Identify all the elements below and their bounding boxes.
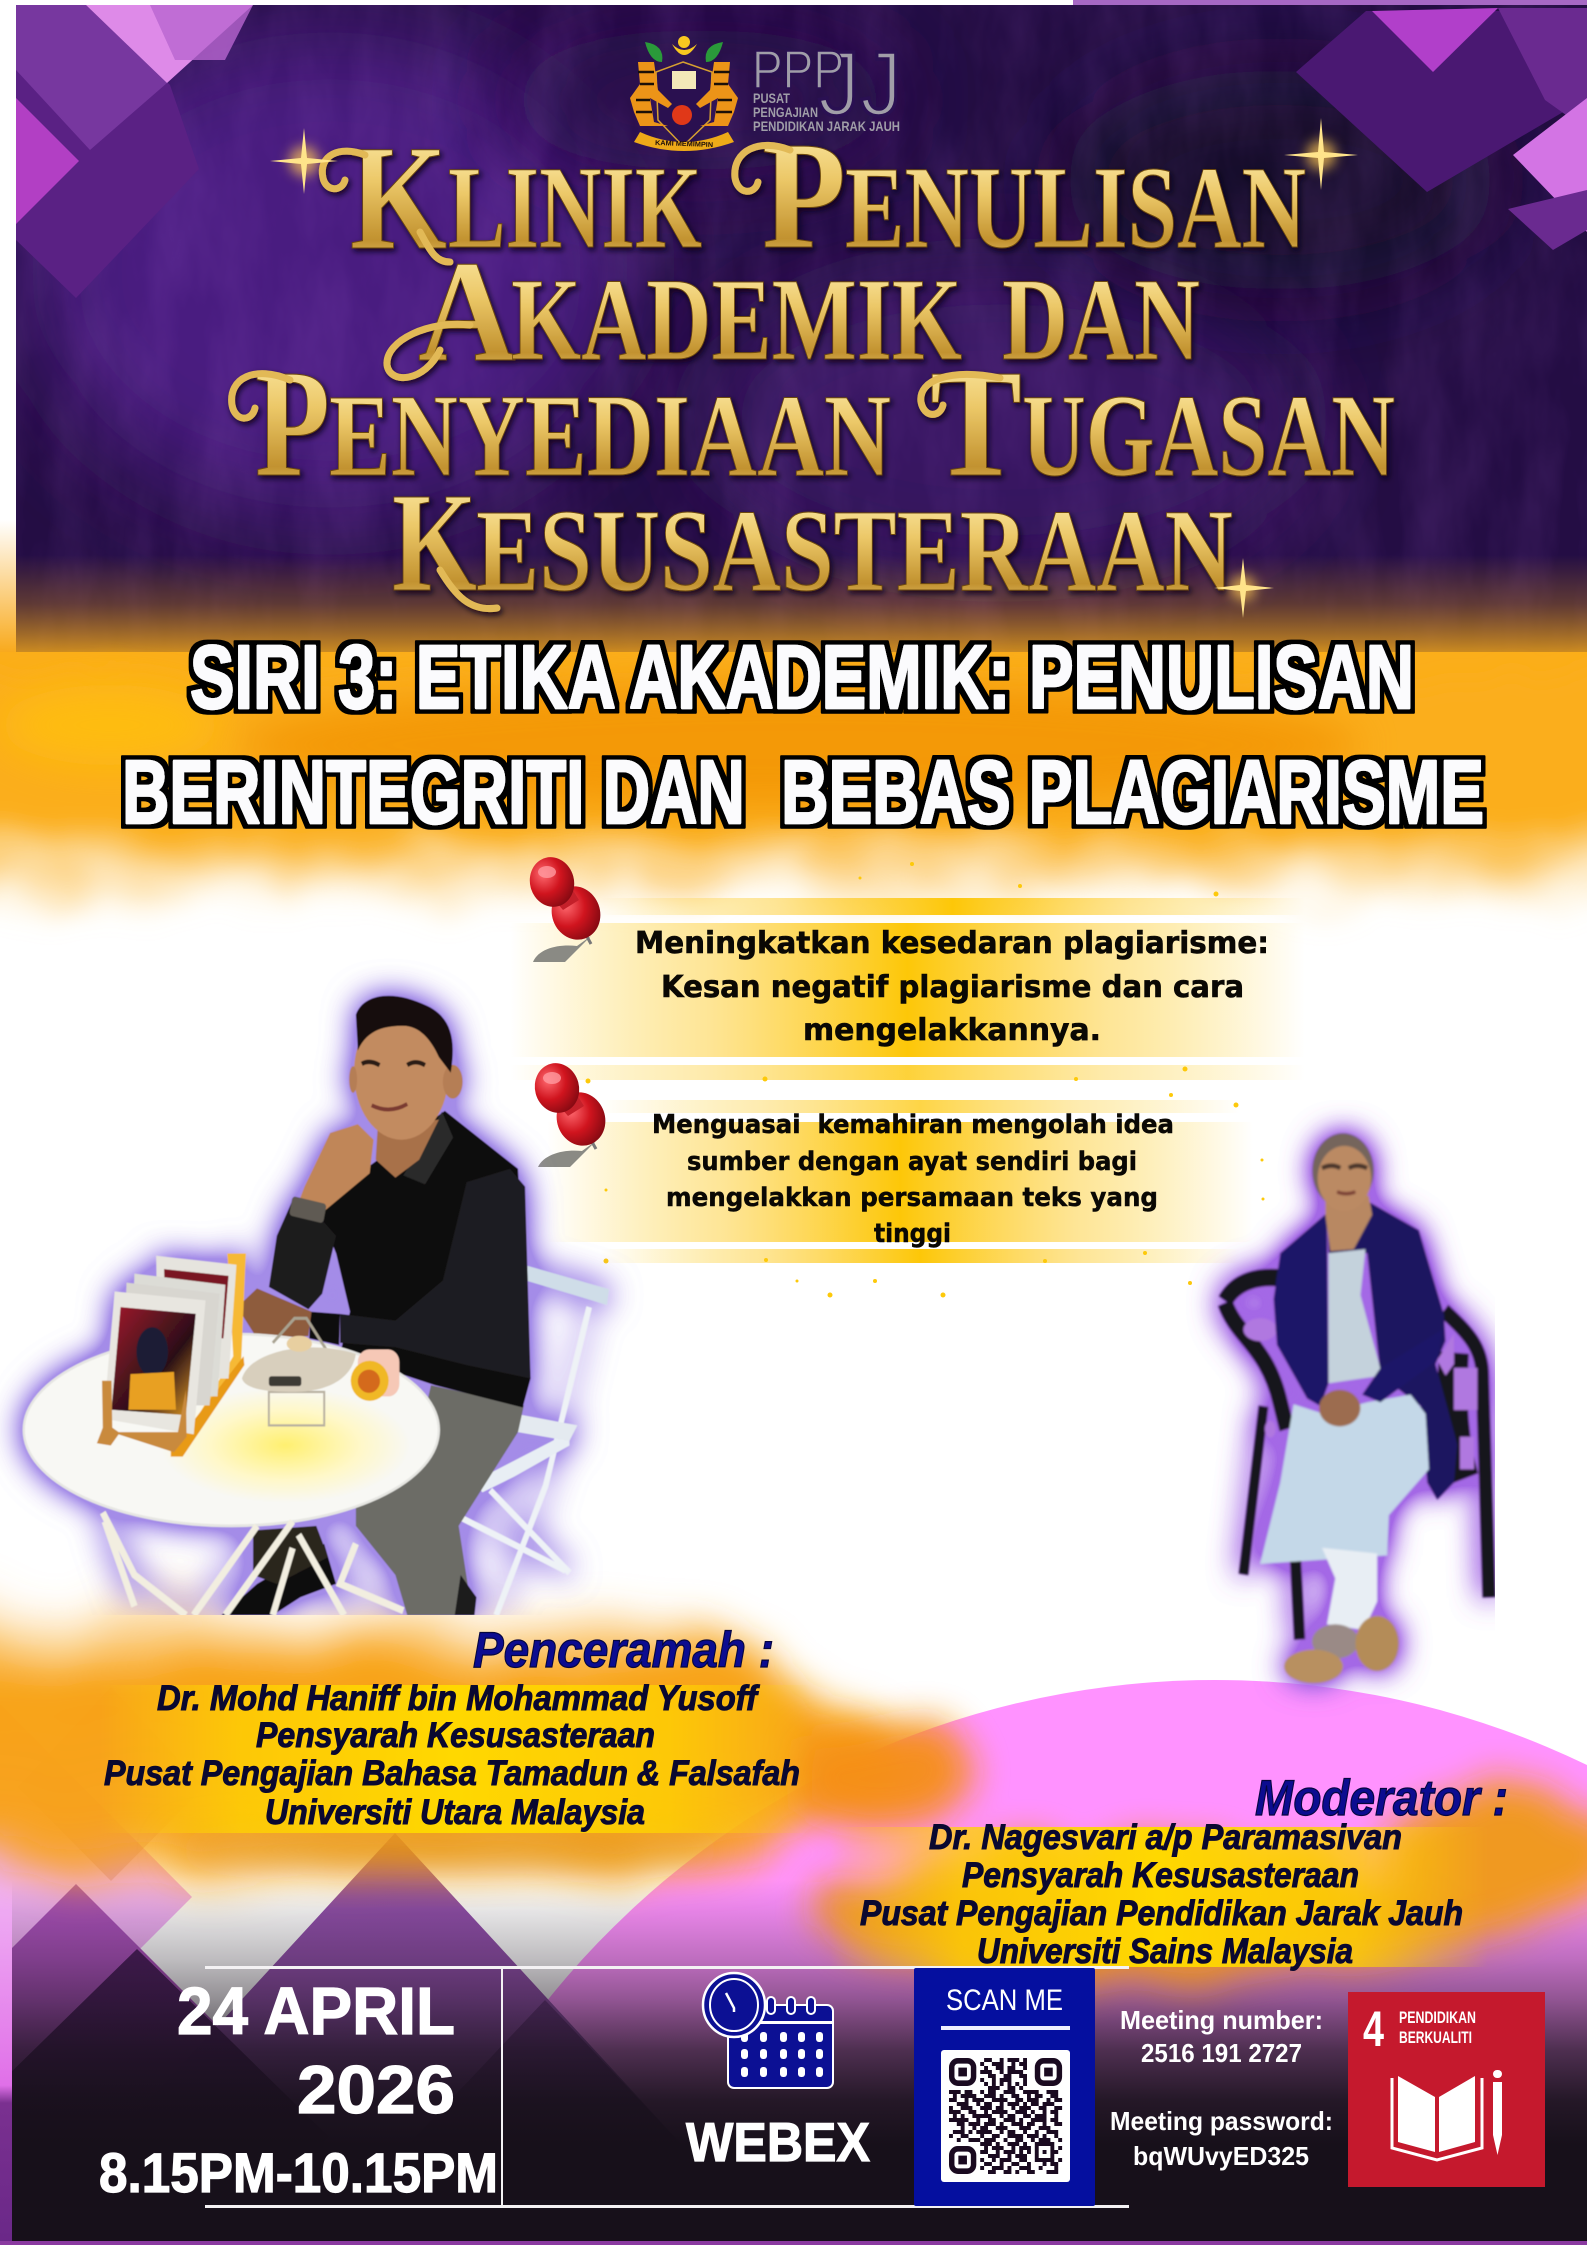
meeting details — [1110, 2005, 1333, 2171]
sparkle star 2 — [1284, 118, 1358, 190]
logo: PPPJJ wordmark: PPP — [752, 40, 844, 100]
pink fan — [358, 1350, 399, 1396]
meeting details: bqWUvyED325 — [1133, 2141, 1309, 2171]
crescent and star — [678, 36, 690, 48]
date and time: 8.15PM-10.15PM — [99, 2141, 498, 2204]
icon: SDG 4 badge: PENDIDIKAN — [1399, 2008, 1476, 2027]
scan divider — [941, 2026, 1070, 2030]
trousers — [356, 1385, 524, 1615]
moderator heading: Moderator : — [1255, 1770, 1508, 1826]
objective text 2: Menguasai kemahiran mengolah idea — [652, 1110, 1174, 1140]
shirt — [316, 1111, 531, 1408]
moderator details — [860, 1818, 1463, 1971]
logo: state crest: KAMI MEMIMPIN — [655, 140, 713, 149]
date and time: 2026 — [297, 2052, 455, 2128]
motto banner — [634, 132, 734, 151]
moderator details: Dr. Nagesvari a/p Paramasivan — [929, 1818, 1402, 1857]
gold sparkle dots — [586, 862, 1264, 1298]
main title: K — [350, 115, 447, 281]
objective bar 2 — [547, 1100, 1253, 1263]
left edge strip — [0, 1890, 12, 2245]
left edge orange glow — [0, 520, 16, 655]
objective text 2: mengelakkan persamaan teks yang — [666, 1183, 1158, 1213]
top right purple strip — [1073, 0, 1587, 5]
shoes — [221, 1544, 336, 1615]
sleeves — [340, 1169, 531, 1379]
icon: SDG 4 badge: 4 — [1363, 2001, 1384, 2057]
title initial swashes — [232, 145, 1000, 609]
info frame lines — [205, 1966, 1129, 2208]
logo: PPPJJ wordmark: PENGAJIAN — [753, 104, 818, 120]
tigers — [630, 62, 672, 126]
hands — [1319, 1390, 1360, 1426]
open book — [672, 71, 696, 89]
date and time: 24 APRIL — [177, 1974, 455, 2049]
objective text 1: Kesan negatif plagiarisme dan cara — [661, 970, 1244, 1005]
objective text 1: Meningkatkan kesedaran plagiarisme: — [635, 926, 1269, 961]
objective text 2: tinggi — [874, 1219, 951, 1249]
orange band darker core — [240, 683, 1360, 807]
meeting details: Meeting number: — [1120, 2005, 1323, 2035]
main title: ENYEDIAAN — [329, 370, 891, 501]
main title: UGASAN — [1022, 370, 1395, 501]
main title: P — [762, 111, 846, 281]
icon: clock and calendar — [703, 1973, 833, 2088]
header corner diamonds left — [16, 5, 253, 298]
lamp — [273, 1318, 326, 1350]
photo: moderator seated on chair — [1225, 1133, 1489, 1683]
blouse — [1329, 1249, 1382, 1383]
icon: red pushpin 2 — [529, 1058, 613, 1167]
sleeves — [1362, 1330, 1442, 1402]
wicker chair — [1225, 1278, 1489, 1640]
panel: scan me — [914, 1968, 1095, 2206]
header panel: purple velvet — [16, 5, 1587, 652]
dark bottom overlay — [12, 1880, 1587, 2241]
speaker details — [104, 1679, 800, 1832]
header corner diamonds right — [1296, 8, 1587, 250]
leggings — [1322, 1548, 1377, 1630]
wicker holes — [1243, 1318, 1477, 1469]
table — [24, 1334, 439, 1526]
meeting details: 2516 191 2727 — [1141, 2038, 1302, 2068]
sparkle star 1 — [270, 128, 338, 194]
speaker heading: Penceramah : — [473, 1622, 774, 1678]
orange band solid top — [0, 652, 1587, 722]
bottom purple edge — [0, 2241, 1587, 2245]
palms — [645, 42, 662, 62]
collar — [403, 1112, 453, 1184]
main title: P — [255, 339, 330, 509]
moderator details: Pensyarah Kesusasteraan — [962, 1856, 1359, 1895]
main title: ENULISAN — [845, 142, 1306, 273]
logo: PPPJJ wordmark: PENDIDIKAN JARAK JAUH — [753, 118, 900, 134]
logo: PPPJJ wordmark: PUSAT — [753, 90, 790, 106]
moderator details: Pusat Pengajian Pendidikan Jarak Jauh — [860, 1894, 1463, 1933]
objective text 2 — [652, 1110, 1174, 1249]
orange tint fade below left bar — [170, 1828, 730, 1872]
dress — [1260, 1395, 1429, 1564]
objective bar 1 — [510, 898, 1305, 1080]
head — [354, 1006, 449, 1140]
qr code — [941, 2050, 1070, 2182]
main title: DAN — [1002, 254, 1200, 385]
cardigan — [1327, 1203, 1457, 1500]
table legs — [103, 1512, 403, 1615]
yellow name bar right — [830, 1827, 1488, 1967]
main title: A — [418, 232, 516, 392]
meeting details: Meeting password: — [1110, 2106, 1333, 2136]
logo: PPPJJ wordmark: JJ — [818, 33, 902, 135]
main title — [232, 111, 1395, 621]
main title: ESUSASTERAAN — [476, 485, 1233, 616]
main title: T — [930, 339, 1022, 509]
icon: SDG 4 badge: BERKUALITI — [1399, 2028, 1472, 2047]
orange cloud lower right — [790, 1725, 1587, 1983]
neck — [1325, 1196, 1372, 1251]
main title: KADEMIK — [511, 254, 962, 385]
main title: K — [392, 463, 477, 621]
platform label: WEBEX — [686, 2111, 870, 2173]
speaker details: Dr. Mohd Haniff bin Mohammad Yusoff — [157, 1679, 760, 1718]
scan label: SCAN ME — [946, 1984, 1063, 2017]
sparkle star 3 — [1214, 558, 1274, 618]
speaker details: Pensyarah Kesusasteraan — [256, 1716, 655, 1755]
bottom decor: pink circle and diamonds — [0, 1680, 1587, 2245]
objective text 1: mengelakkannya. — [803, 1013, 1101, 1048]
yellow name bar left — [100, 1685, 810, 1833]
logo: PPPJJ wordmark — [752, 33, 902, 135]
book rack — [171, 1254, 246, 1457]
moderator details: Universiti Sains Malaysia — [977, 1932, 1353, 1971]
orange cloud band upper — [0, 680, 1587, 915]
speaker details: Universiti Utara Malaysia — [265, 1793, 645, 1832]
socks and shoes — [1312, 1624, 1359, 1659]
photo: speaker seated at table — [24, 996, 609, 1615]
main title: LINIK — [448, 142, 702, 273]
hands and neck — [376, 1120, 439, 1178]
icon: red pushpin 1 — [524, 852, 608, 962]
objective text 2: sumber dengan ayat sendiri bagi — [687, 1147, 1137, 1177]
hibiscus — [672, 105, 692, 125]
icon: SDG 4 badge — [1348, 1992, 1545, 2187]
chair — [451, 1262, 609, 1615]
logo: state crest — [630, 36, 738, 151]
head — [1312, 1133, 1374, 1208]
objective text 1 — [635, 926, 1269, 1048]
orange cloud lower left — [0, 1590, 901, 1891]
date and time — [99, 1974, 498, 2204]
speaker details: Pusat Pengajian Bahasa Tamadun & Falsafah — [104, 1754, 800, 1793]
series heading — [122, 628, 1484, 843]
